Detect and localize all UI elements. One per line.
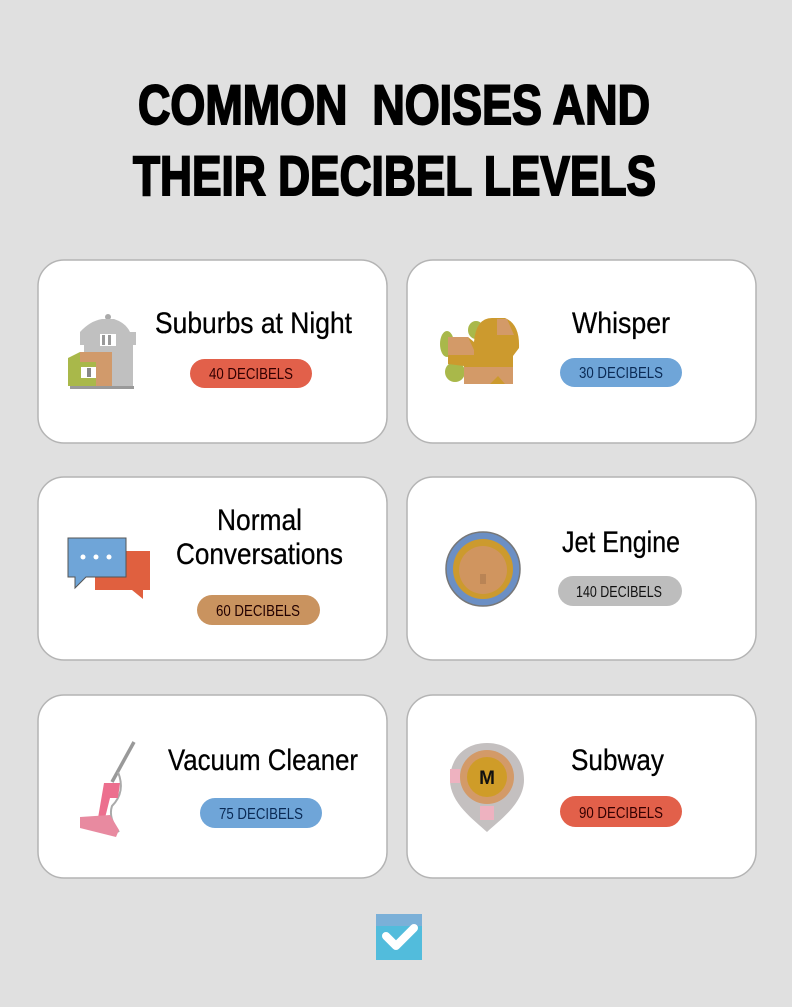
pill: 40 decibels: 40 DECIBELS	[209, 366, 293, 383]
title: COMMON NOISES AND	[138, 73, 650, 136]
pill: 140 decibels	[558, 576, 682, 606]
panel: normal conversations	[38, 477, 387, 660]
heading: suburbs at night: Suburbs at Night	[155, 307, 353, 340]
heading: jet engine: Jet Engine	[562, 526, 680, 559]
panel: jet engine	[407, 477, 756, 660]
heading: vacuum cleaner: Vacuum Cleaner	[168, 744, 358, 777]
icon: speech bubbles	[68, 538, 150, 599]
pill: 60 decibels: 60 DECIBELS	[216, 603, 300, 620]
heading: normal conversations: Normal	[217, 504, 302, 537]
pill: 90 decibels	[560, 796, 682, 827]
icon: cupped hand	[440, 318, 519, 384]
heading: normal conversations: Conversations	[176, 538, 343, 571]
pill: 40 decibels	[190, 359, 312, 388]
title	[133, 73, 656, 207]
heading: normal conversations	[176, 504, 343, 571]
icon: houses	[68, 314, 136, 389]
pill: 75 decibels: 75 DECIBELS	[219, 806, 303, 823]
icon: check mark badge	[376, 914, 422, 960]
pill: 75 decibels	[200, 798, 322, 828]
heading: subway: Subway	[571, 744, 664, 777]
panel: vacuum cleaner	[38, 695, 387, 878]
pill: 30 decibels	[560, 358, 682, 387]
pill: 140 decibels: 140 DECIBELS	[576, 584, 662, 601]
pill: 30 decibels: 30 DECIBELS	[579, 365, 663, 382]
panel: subway	[407, 695, 756, 878]
icon: jet engine	[446, 532, 520, 606]
icon: subway pin	[450, 743, 524, 832]
heading: whisper: Whisper	[572, 307, 670, 340]
panel: suburbs at night	[38, 260, 387, 443]
icon: vacuum cleaner	[80, 742, 134, 837]
title: THEIR DECIBEL LEVELS	[133, 144, 656, 207]
panel: whisper	[407, 260, 756, 443]
icon: subway pin: M	[479, 768, 495, 789]
pill: 90 decibels: 90 DECIBELS	[579, 805, 663, 822]
pill: 60 decibels	[197, 595, 320, 625]
